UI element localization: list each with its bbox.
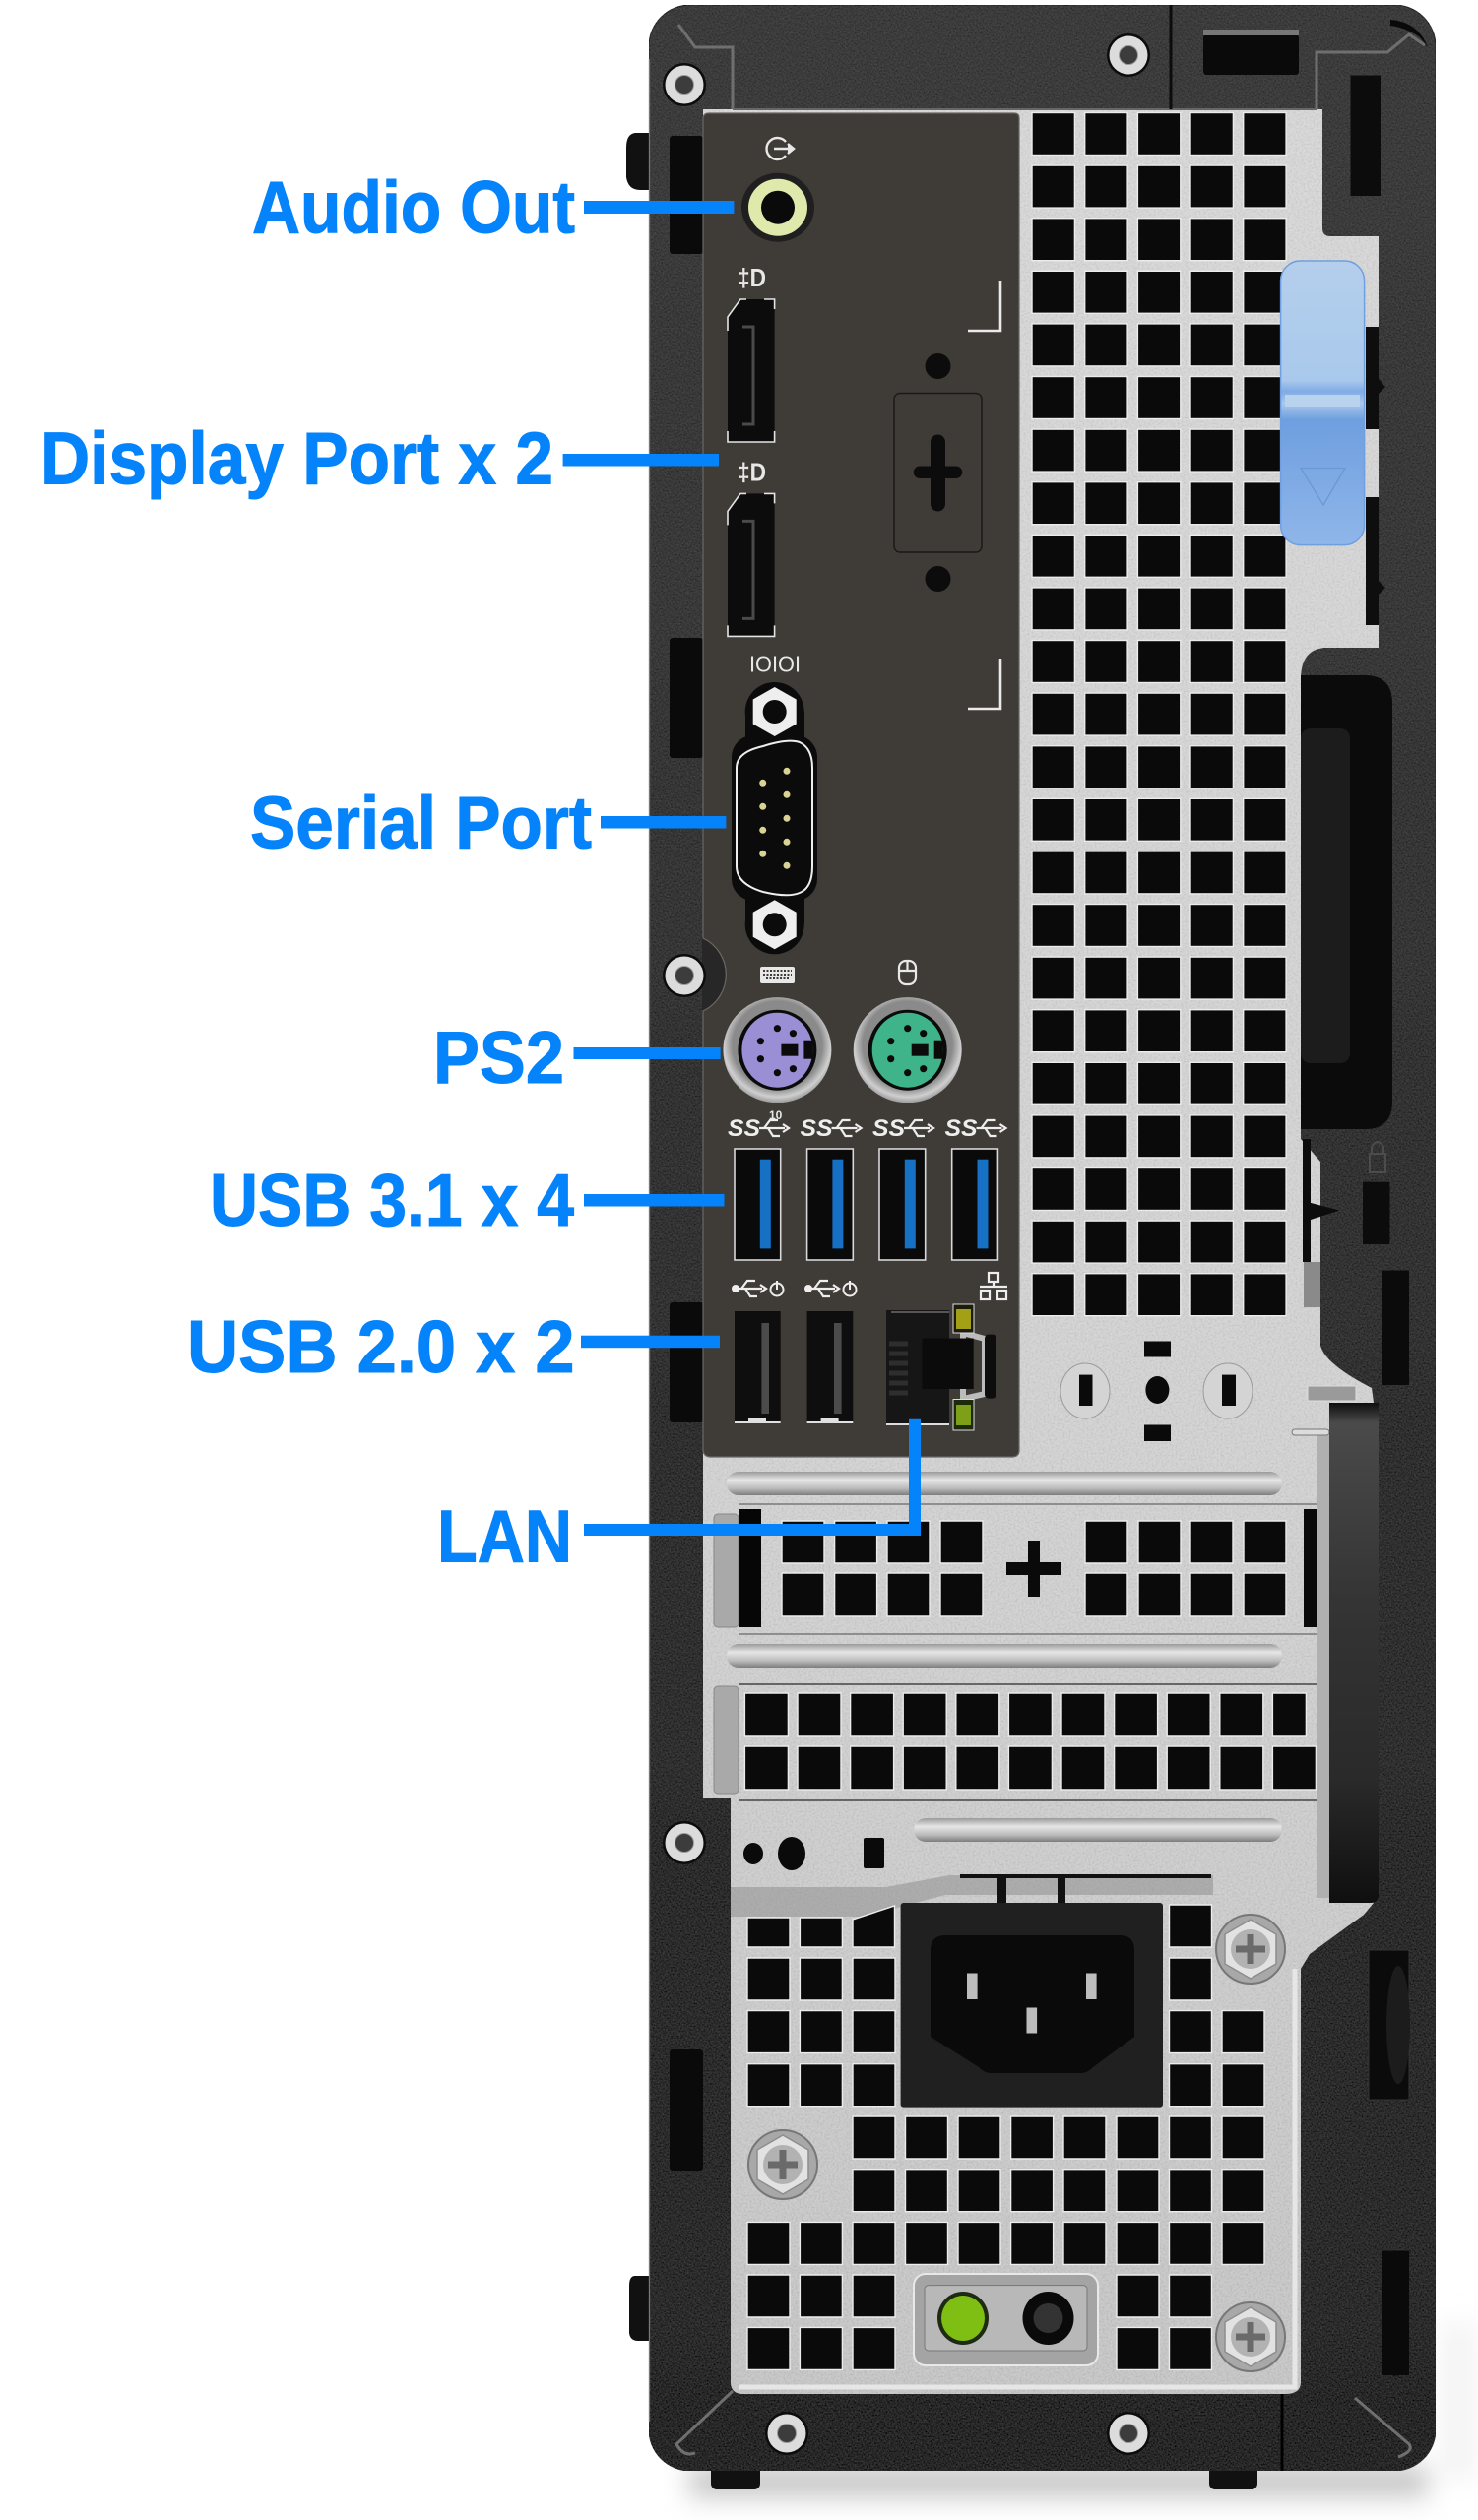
right side black handle — [1292, 1386, 1379, 1903]
power supply screws — [748, 1915, 1285, 2371]
icon: displayport lower: ‡D — [738, 457, 766, 486]
label: LAN — [437, 1419, 921, 1578]
side nubs and feet — [626, 133, 1257, 2489]
USB 2.0 ports — [735, 1311, 853, 1423]
PS2 keyboard port — [723, 997, 831, 1102]
icon: audio out — [767, 138, 794, 159]
label: USB 2.0 x 2: USB 2.0 x 2 — [187, 1305, 575, 1388]
I/O panel — [703, 113, 1019, 1457]
left side slots — [670, 136, 704, 2171]
silver plate screw holes — [1060, 1341, 1253, 1441]
blue release latch — [1281, 261, 1385, 625]
icon: USB 3 SS fourth: SS — [945, 1115, 977, 1142]
icon: USB 3 SS second: SS — [800, 1115, 833, 1142]
PS2 mouse port — [854, 997, 962, 1102]
silver metal plate — [703, 109, 1379, 2394]
display port upper — [728, 299, 775, 442]
padlock mark and lock slot — [1304, 1139, 1409, 1385]
label: LAN: LAN — [437, 1495, 572, 1578]
icon: network — [980, 1273, 1007, 1299]
LAN port — [886, 1304, 996, 1430]
right side recess — [1301, 675, 1392, 1129]
icon: keyboard — [760, 967, 795, 983]
label: USB 3.1 x 4: USB 3.1 x 4 — [210, 1159, 574, 1241]
USB 3.1 ports — [735, 1149, 997, 1260]
icon: displayport upper: ‡D — [738, 263, 766, 292]
label: Display Port x 2: Display Port x 2 — [40, 417, 553, 500]
icon: serial: IOIOI — [749, 652, 801, 677]
plate mounting holes — [743, 1837, 884, 1870]
icon: USB 2 second — [804, 1281, 857, 1296]
blank knockout with plus — [894, 353, 982, 592]
upper ventilation grid — [1032, 112, 1286, 1316]
power status LED housing — [914, 2274, 1098, 2365]
serial port — [732, 682, 817, 954]
metal ribs — [727, 1472, 1282, 1842]
icon: USB 3 SS 10 — [728, 1108, 789, 1142]
top bezel details — [678, 5, 1428, 196]
floor shadow — [689, 2323, 1478, 2497]
chassis screws — [663, 33, 1150, 2455]
expansion slot with plus mark — [714, 1504, 1317, 1634]
expansion slot with vent row — [714, 1684, 1317, 1800]
icon: USB 3 SS third: SS — [872, 1115, 905, 1142]
chassis — [649, 5, 1436, 2471]
audio jack — [741, 173, 814, 242]
label: PS2 — [433, 1016, 721, 1099]
bottom bezel — [676, 1950, 1410, 2471]
display port lower — [728, 493, 775, 636]
icon: USB 2 first — [732, 1281, 784, 1296]
power socket — [901, 1903, 1163, 2108]
label: Serial Port: Serial Port — [250, 782, 592, 864]
icon: USB 3 SS fourth — [945, 1115, 1006, 1142]
label: PS2: PS2 — [433, 1016, 564, 1099]
icon: USB 3 SS 10: SS — [728, 1115, 760, 1142]
label: Audio Out: Audio Out — [252, 166, 575, 249]
screw boss on chassis — [702, 937, 728, 1012]
power supply plate — [731, 1875, 1295, 2387]
icon: USB 3 SS third — [872, 1115, 933, 1142]
power supply vents — [747, 1905, 1264, 2369]
icon: mouse — [899, 961, 916, 984]
icon: USB 3 SS 10: 10 — [769, 1108, 783, 1122]
icon: USB 3 SS second — [800, 1115, 861, 1142]
